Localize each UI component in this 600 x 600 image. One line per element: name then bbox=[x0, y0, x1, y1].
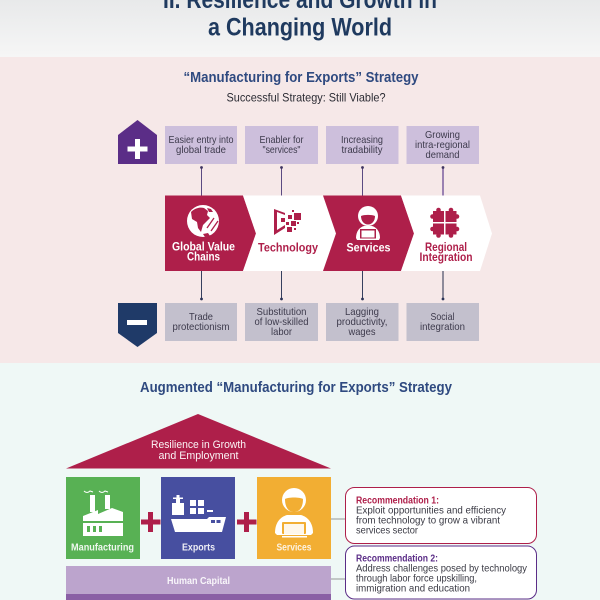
label: Global Value bbox=[172, 242, 235, 254]
callout: recommendation 2: Address challenges posed by technology bbox=[356, 562, 528, 574]
bar: human capital bbox=[66, 566, 331, 594]
callout: recommendation 2 bbox=[346, 546, 536, 599]
pillar: exports bbox=[161, 477, 235, 559]
positives row: "services" bbox=[262, 144, 301, 156]
roof: and Employment bbox=[158, 450, 238, 462]
positives row: Easier entry into bbox=[168, 134, 234, 146]
roof bbox=[66, 414, 331, 468]
callout: recommendation 2: Recommendation 2: bbox=[356, 552, 438, 564]
callout: recommendation 1: Recommendation 1: bbox=[356, 494, 439, 506]
positives row: global trade bbox=[176, 144, 226, 156]
chevron: technology bbox=[243, 196, 336, 271]
connectors to recommendations bbox=[331, 519, 345, 579]
negatives row: Social bbox=[430, 311, 454, 323]
positives row: intra-regional bbox=[415, 139, 470, 151]
pillar: services: Services bbox=[276, 542, 312, 554]
positives row: Increasing bbox=[341, 134, 383, 146]
title: a Changing World bbox=[208, 14, 392, 42]
icon: minus shield bbox=[118, 303, 157, 347]
icon: technology bbox=[274, 209, 301, 235]
negatives row bbox=[165, 303, 479, 341]
negatives row: of low-skilled bbox=[254, 316, 309, 328]
positives row bbox=[165, 126, 479, 164]
panel heading: Augmented “Manufacturing for Exports” Strategy bbox=[140, 380, 452, 396]
callout: recommendation 1: Exploit opportunities and efficiency bbox=[356, 504, 507, 516]
icon: ship bbox=[171, 495, 226, 532]
panel: augmented strategy bbox=[0, 363, 600, 600]
icon: puzzle bbox=[430, 208, 459, 238]
bar: foundation bbox=[66, 594, 331, 600]
chevron: regional integration: Integration bbox=[420, 252, 472, 264]
header band bbox=[0, 0, 600, 57]
label: Regional bbox=[425, 242, 467, 254]
connectors up bbox=[200, 166, 444, 196]
negatives row: protectionism bbox=[172, 321, 230, 333]
callout: recommendation 2: immigration and education bbox=[356, 582, 470, 594]
pillar: services bbox=[257, 477, 331, 559]
chevron: global value chains: Chains bbox=[187, 252, 220, 264]
icon: person at laptop bbox=[275, 488, 313, 538]
callout: recommendation 1: from technology to grow a vibrant bbox=[356, 514, 500, 526]
positives row: Enabler for bbox=[260, 134, 304, 146]
negatives row: Lagging bbox=[345, 306, 379, 318]
icon: person at laptop bbox=[356, 206, 380, 240]
callout: recommendation 1: services sector bbox=[356, 524, 418, 536]
negatives row: labor bbox=[271, 326, 292, 338]
negatives row: wages bbox=[348, 326, 376, 338]
positives row: demand bbox=[426, 149, 460, 161]
panel: manufacturing for exports strategy bbox=[0, 57, 600, 363]
positives row: tradability bbox=[342, 144, 383, 156]
panel subheading: Successful Strategy: Still Viable? bbox=[226, 90, 386, 104]
callout: recommendation 2: through labor force upskilling, bbox=[356, 572, 477, 584]
chevron: global value chains bbox=[165, 196, 256, 271]
icon: plus house bbox=[118, 120, 157, 164]
chevron: services bbox=[323, 196, 414, 271]
label: Services bbox=[346, 242, 390, 254]
title bbox=[163, 0, 437, 42]
roof: Resilience in Growth bbox=[151, 439, 246, 451]
plus sign bbox=[141, 512, 160, 532]
label: Technology bbox=[258, 242, 319, 254]
negatives row: productivity, bbox=[336, 316, 388, 328]
plus sign bbox=[237, 512, 256, 532]
negatives row: Substitution bbox=[256, 306, 307, 318]
bar: human capital: Human Capital bbox=[167, 575, 230, 587]
pillar: exports: Exports bbox=[182, 542, 215, 554]
negatives row: Trade bbox=[189, 311, 213, 323]
icon: globe bbox=[187, 205, 219, 237]
pillar: manufacturing: Manufacturing bbox=[71, 542, 134, 554]
connectors down bbox=[200, 271, 444, 300]
positives row: Growing bbox=[425, 129, 460, 141]
negatives row: integration bbox=[420, 321, 465, 333]
icon: factory bbox=[83, 491, 123, 536]
chevron: regional integration bbox=[401, 196, 492, 271]
panel heading: “Manufacturing for Exports” Strategy bbox=[184, 70, 418, 86]
pillar: manufacturing bbox=[66, 477, 140, 559]
callout: recommendation 1 bbox=[346, 488, 536, 544]
